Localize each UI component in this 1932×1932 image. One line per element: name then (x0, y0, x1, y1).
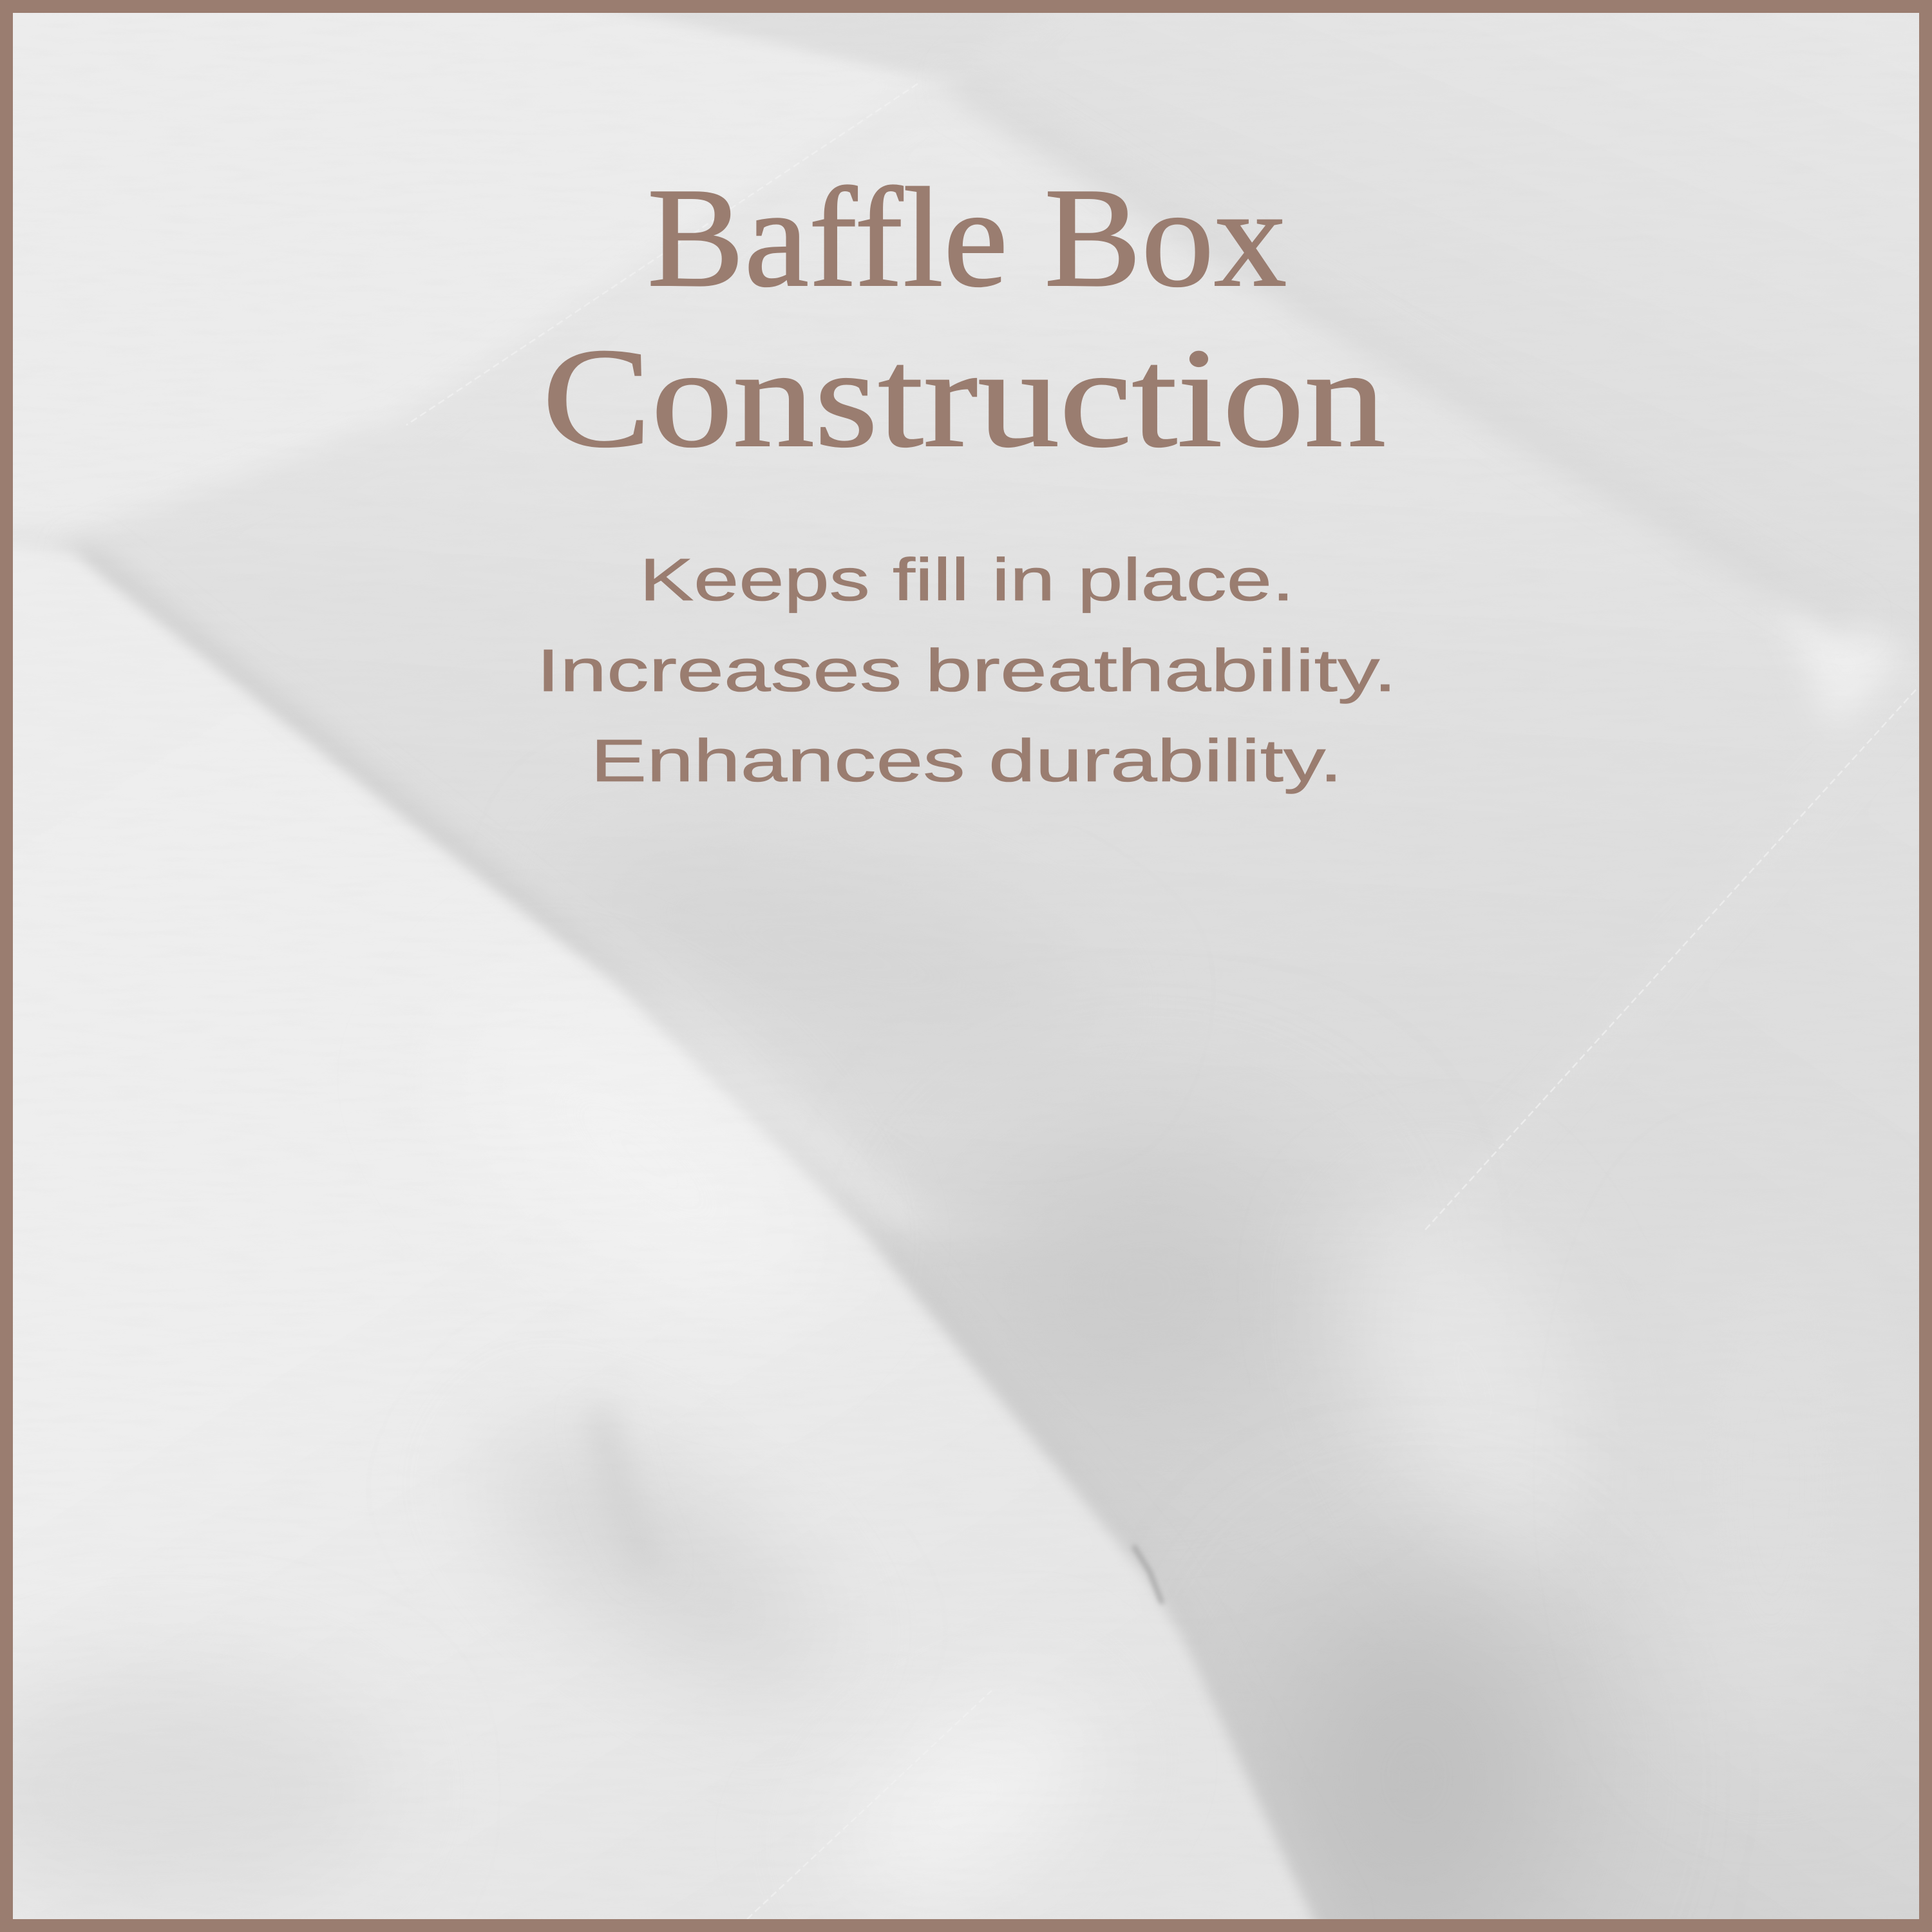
lower-right panel tones (1318, 1170, 1632, 1599)
subtitle benefits: Keeps fill in place. (639, 546, 1294, 613)
subtitle benefits: Increases breathability. (536, 637, 1397, 704)
stitch lines (406, 84, 1916, 1919)
title (542, 158, 1386, 477)
lower-left seam shadow (74, 554, 1331, 1932)
subtitle benefits: Enhances durability. (591, 727, 1343, 794)
subtitle benefits (536, 546, 1397, 794)
center quilt panel (74, 80, 1916, 1232)
lower-left quilt panel (0, 535, 1331, 1932)
center panel upper seam shadow (953, 82, 1855, 625)
top center fold panel (567, 0, 1082, 80)
top-left quilt panel (0, 0, 949, 535)
center panel right lip highlight (1777, 599, 1900, 734)
center panel lower shading (966, 1140, 1327, 1436)
top-right quilt panel (953, 0, 1932, 670)
title: Baffle Box (647, 158, 1287, 316)
fold crease in left panel (599, 1410, 650, 1571)
title: Construction (542, 319, 1386, 477)
seam pinch near the bottom (1133, 1546, 1162, 1604)
lower-right quilt panel (862, 690, 1932, 1932)
